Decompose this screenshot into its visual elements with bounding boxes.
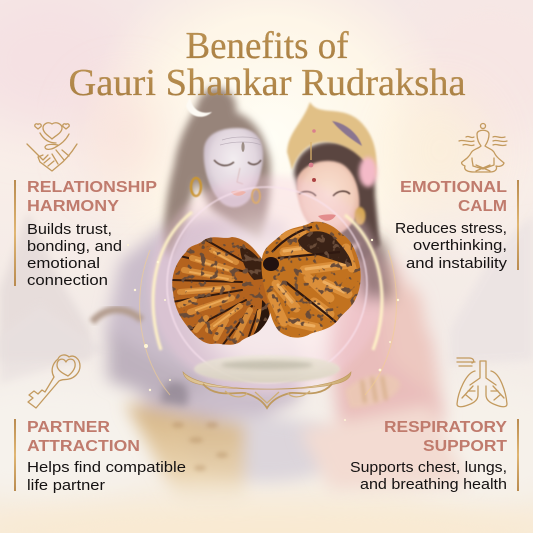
rudraksha beads xyxy=(172,222,361,345)
golden platform xyxy=(183,355,351,408)
accent bar xyxy=(14,180,16,286)
heading: SUPPORT xyxy=(423,438,507,455)
panel: relationship harmony xyxy=(14,123,157,289)
title: Benefits of xyxy=(186,25,349,67)
description: Helps find compatible xyxy=(27,460,186,476)
panel: respiratory support xyxy=(350,358,519,493)
heading: RELATIONSHIP xyxy=(27,179,157,196)
title: Gauri Shankar Rudraksha xyxy=(68,62,466,104)
figure: Shiva xyxy=(92,88,342,505)
description: Builds trust, xyxy=(27,222,112,238)
heading: PARTNER xyxy=(27,419,110,436)
title xyxy=(68,25,466,104)
icon: handshake with hearts xyxy=(27,123,77,171)
description: emotional xyxy=(27,256,100,272)
halo rings and sparkles xyxy=(127,175,399,421)
heading: EMOTIONAL xyxy=(400,179,507,196)
description: bonding, and xyxy=(27,239,122,255)
icon: meditating figure xyxy=(459,124,507,172)
heading: ATTRACTION xyxy=(27,438,140,455)
icon: lungs with breath xyxy=(457,358,507,407)
panel: partner attraction xyxy=(14,355,186,494)
description: connection xyxy=(27,273,108,289)
face xyxy=(204,128,263,207)
hazy mountains xyxy=(0,212,90,360)
accent bar xyxy=(517,180,519,270)
accent bar xyxy=(14,419,16,491)
crown xyxy=(287,102,376,178)
heading: CALM xyxy=(458,198,507,215)
description: life partner xyxy=(27,478,105,494)
description: overthinking, xyxy=(413,238,507,254)
accent bar xyxy=(517,419,519,491)
heading: RESPIRATORY xyxy=(384,419,507,436)
description: and instability xyxy=(406,256,508,272)
panel: emotional calm xyxy=(395,124,519,272)
right bead xyxy=(262,222,361,338)
description: Supports chest, lungs, xyxy=(350,460,507,476)
left bead xyxy=(172,237,270,345)
hair xyxy=(164,88,271,258)
description: and breathing health xyxy=(360,477,507,493)
figure: Parvati xyxy=(287,102,470,490)
icon: heart key xyxy=(28,355,80,408)
heading: HARMONY xyxy=(27,198,119,215)
description: Reduces stress, xyxy=(395,221,507,237)
